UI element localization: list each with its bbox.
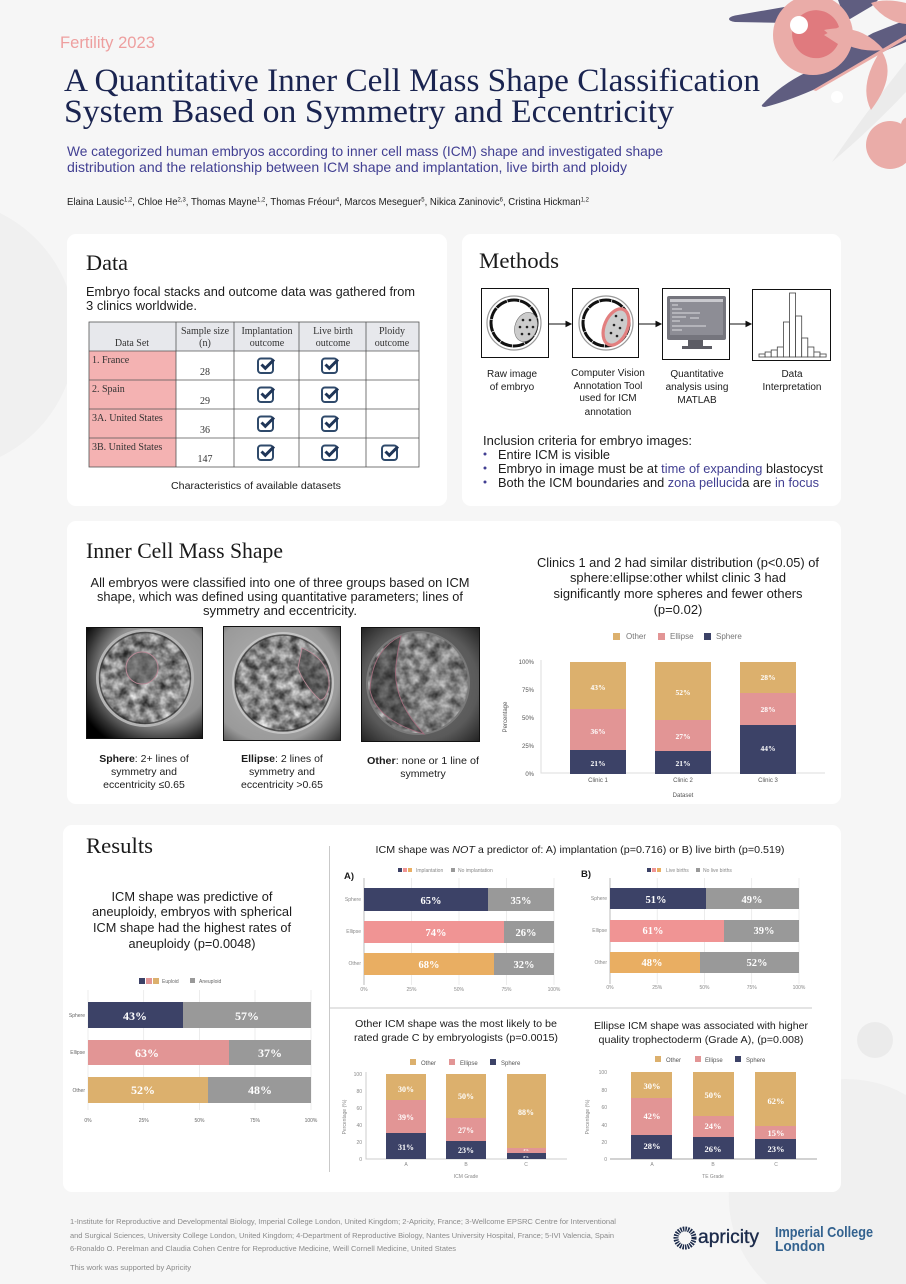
stacked bar chart: TE grade <box>585 1056 817 1180</box>
bar chart: A implantation: 74% <box>426 928 446 939</box>
text: trophectoderm finding: Ellipse ICM shape was associated with higher <box>594 1020 808 1032</box>
text: inclusion criteria: Both the ICM boundaries and zona pellucida are in focus <box>498 476 819 490</box>
legend: Aneuploid <box>199 979 221 985</box>
stacked bar chart: ICM grade: 30% <box>398 1085 414 1094</box>
text: aneuploidy finding: ICM shape had the highest rates of <box>93 920 291 935</box>
bar chart: A implantation: A) <box>344 871 354 882</box>
footer affiliations: 1-Institute for Reproductive and Developmental Biology, Imperial College London, United Kingdom; 2-Apricity, France; 3-Wellcome EPSRC Centre for Interventional <box>70 1217 616 1226</box>
labels: workflow steps: Quantitative <box>670 369 724 380</box>
authors: 1,2 <box>257 196 266 204</box>
stacked bar chart: ICM grade: 0 <box>359 1157 362 1163</box>
labels: workflow steps: of embryo <box>490 382 535 393</box>
bar chart: aneuploidy: 75% <box>250 1118 261 1124</box>
bar chart: aneuploidy: 57% <box>235 1009 259 1023</box>
legend: Ellipse <box>670 632 694 641</box>
stacked bar chart: ICM grade: B <box>464 1162 468 1168</box>
stacked bar chart: clinics: 28% <box>760 705 776 714</box>
bar chart: aneuploidy: Sphere <box>69 1013 85 1019</box>
legend: Euploid <box>162 979 179 985</box>
stacked bar chart: TE grade: B <box>711 1162 715 1168</box>
stacked bar chart: TE grade: TE Grade <box>702 1174 724 1180</box>
bar chart: A implantation: Other <box>348 961 361 967</box>
logo: imperial college london <box>775 1224 873 1255</box>
bar chart: A implantation: Ellipse <box>346 929 361 935</box>
bar chart: A implantation: 65% <box>420 896 442 907</box>
logo: imperial college london: London <box>775 1238 825 1255</box>
table: datasets: 3A. United States <box>92 413 163 424</box>
authors: , Thomas Fréour <box>265 196 336 208</box>
bar chart: A implantation: 26% <box>516 928 536 939</box>
stacked bar chart: TE grade: 30% <box>644 1081 660 1091</box>
text: classification intro: All embryos were classified into one of three groups based on ICM <box>90 576 470 590</box>
text: aneuploidy finding: ICM shape was predictive of <box>112 889 273 904</box>
stacked bar chart: clinics: Dataset <box>673 793 694 799</box>
stacked bar chart: clinics: 75% <box>522 688 535 694</box>
footer affiliations <box>70 1217 616 1272</box>
stacked bar chart: TE grade: 62% <box>768 1096 784 1106</box>
text: clinic distribution: sphere:ellipse:other whilst clinic 3 had <box>570 570 786 585</box>
authors: , Thomas Mayne <box>186 196 257 208</box>
heading: inner cell mass shape: Inner Cell Mass Shape <box>86 538 283 563</box>
arrow <box>730 322 751 326</box>
text: classification intro: shape, which was defined using quantitative parameters; lines of <box>97 590 463 604</box>
stacked bar chart: clinics: 36% <box>590 727 606 736</box>
image: sphere embryo <box>86 628 202 738</box>
bar chart: A implantation: Sphere <box>345 897 361 903</box>
table: datasets: 28 <box>200 367 210 378</box>
bar chart: B live birth: 39% <box>754 926 774 937</box>
caption: ellipse: Ellipse: 2 lines of <box>241 753 323 765</box>
labels: workflow steps: Annotation Tool <box>574 381 642 392</box>
labels: workflow steps: annotation <box>585 407 631 418</box>
stacked bar chart: clinics: 0% <box>525 772 535 778</box>
stacked bar chart: clinics: 21% <box>590 759 606 768</box>
stacked bar chart: ICM grade: 27% <box>458 1126 474 1135</box>
text: trophectoderm finding: quality trophectoderm (Grade A), (p=0.008) <box>598 1034 804 1046</box>
stacked bar chart: TE grade: 26% <box>704 1144 722 1154</box>
bar chart: B live birth: 61% <box>642 926 664 937</box>
caption: sphere: Sphere: 2+ lines of <box>99 753 189 765</box>
authors: 5 <box>421 196 425 204</box>
labels: workflow steps: MATLAB <box>677 395 717 406</box>
bar chart: A implantation: 25% <box>406 987 417 993</box>
stacked bar chart: clinics: Clinic 3 <box>758 778 778 784</box>
table: datasets: 29 <box>200 396 210 407</box>
title: A Quantitative Inner Cell Mass Shape Classification <box>64 63 760 99</box>
stacked bar chart: ICM grade: 100 <box>354 1072 362 1078</box>
bar chart: aneuploidy: 63% <box>135 1046 159 1060</box>
text: grade C finding <box>354 1018 558 1044</box>
bar chart: A implantation: 100% <box>548 987 561 993</box>
text: inclusion criteria: Inclusion criteria for embryo images: <box>483 434 692 448</box>
bar chart: B live birth <box>581 868 806 991</box>
stacked bar chart: ICM grade: A <box>404 1162 408 1168</box>
icon: raw embryo <box>482 288 548 358</box>
authors: 1,2 <box>581 196 589 204</box>
legend: No implantation <box>458 868 493 874</box>
legend: No live births <box>703 868 732 874</box>
stacked bar chart: TE grade: C <box>774 1162 778 1168</box>
caption: other: Other: none or 1 line of <box>367 755 479 767</box>
bar chart: A implantation: 68% <box>418 960 440 971</box>
stacked bar chart: clinics: Clinic 1 <box>588 778 608 784</box>
text: inclusion criteria <box>483 434 824 490</box>
bar chart: B live birth: 48% <box>642 958 662 969</box>
stacked bar chart: TE grade: 15% <box>768 1128 784 1138</box>
legend: Sphere <box>746 1058 766 1064</box>
stacked bar chart: clinics: 27% <box>676 732 690 741</box>
table: datasets: outcome <box>375 338 410 349</box>
labels: workflow steps: Interpretation <box>763 382 821 393</box>
table: datasets: Ploidy <box>379 326 405 337</box>
table: datasets: 2. Spain <box>92 384 125 395</box>
stacked bar chart: ICM grade <box>342 1059 567 1180</box>
caption: sphere: symmetry and <box>111 766 177 778</box>
caption: ellipse: eccentricity >0.65 <box>241 779 323 791</box>
text: aneuploidy finding: aneuploidy, embryos with spherical <box>92 904 292 919</box>
stacked bar chart: clinics: 43% <box>590 683 606 692</box>
text: aneuploidy finding <box>92 889 292 951</box>
table: datasets: outcome <box>250 338 285 349</box>
table: datasets: 3B. United States <box>92 442 162 453</box>
panel: inner cell mass shape <box>67 521 841 804</box>
table: datasets: (n) <box>199 338 211 349</box>
stacked bar chart: clinics: 100% <box>519 660 535 666</box>
decorative botanical illustration <box>729 0 906 169</box>
stacked bar chart: TE grade: 40 <box>601 1123 607 1129</box>
arrow <box>549 322 571 326</box>
bar chart: aneuploidy: 48% <box>248 1083 272 1097</box>
bar chart: aneuploidy: 37% <box>258 1046 282 1060</box>
stacked bar chart: clinics: Percentage <box>503 701 509 732</box>
panel: methods <box>462 234 841 506</box>
bar chart: aneuploidy: Ellipse <box>70 1050 85 1056</box>
arrow <box>639 322 661 326</box>
legend: Other <box>666 1058 681 1064</box>
stacked bar chart: TE grade: 24% <box>704 1121 722 1131</box>
text: not a predictor: ICM shape was NOT a predictor of: A) implantation (p=0.716) or B) live birth (p=0.519) <box>376 844 784 856</box>
text: data intro <box>86 285 415 313</box>
authors: Elaina Lausic <box>67 196 129 208</box>
bar chart: aneuploidy: 25% <box>139 1118 149 1124</box>
table: datasets: 147 <box>198 454 212 465</box>
stacked bar chart: ICM grade: 88% <box>518 1108 534 1117</box>
caption: other: symmetry <box>400 768 446 780</box>
authors: , Chloe He <box>132 196 178 208</box>
caption: ellipse <box>241 753 323 791</box>
stacked bar chart: TE grade: 20 <box>601 1140 607 1146</box>
stacked bar chart: ICM grade: 31% <box>398 1143 414 1152</box>
stacked bar chart: ICM grade: 20 <box>356 1140 362 1146</box>
labels: workflow steps: used for ICM <box>579 393 637 404</box>
legend: Implantation <box>416 868 443 874</box>
bar chart: B live birth: Other <box>594 960 607 966</box>
text: trophectoderm finding <box>594 1020 808 1046</box>
bar chart: B live birth: 51% <box>646 895 666 906</box>
stacked bar chart: TE grade: 0 <box>604 1157 607 1163</box>
table: datasets: Sample size <box>181 326 230 337</box>
text: aneuploidy finding: aneuploidy (p=0.0048) <box>128 936 256 951</box>
image: other embryo <box>362 628 480 742</box>
stacked bar chart: TE grade: 23% <box>768 1144 784 1154</box>
legend: Live births <box>666 868 689 874</box>
labels: workflow steps: Raw image <box>487 369 537 380</box>
legend <box>139 978 221 985</box>
stacked bar chart: clinics <box>503 632 825 799</box>
legend: Sphere <box>501 1061 521 1067</box>
authors: 4 <box>336 196 340 204</box>
stacked bar chart: TE grade: 28% <box>644 1141 660 1151</box>
bar chart: aneuploidy: 43% <box>123 1009 147 1023</box>
bar chart: aneuploidy: 50% <box>194 1118 205 1124</box>
text: grade C finding: Other ICM shape was the most likely to be <box>355 1018 557 1030</box>
text: clinic distribution <box>537 555 819 617</box>
conference label: Fertility 2023 <box>60 33 155 52</box>
stacked bar chart: ICM grade: 40 <box>356 1123 362 1129</box>
subtitle <box>67 143 663 175</box>
bar chart: B live birth: Ellipse <box>592 928 607 934</box>
stacked bar chart: TE grade: 50% <box>704 1090 722 1100</box>
bar chart: A implantation: 75% <box>501 987 512 993</box>
bar chart: A implantation: 50% <box>454 987 465 993</box>
stacked bar chart: TE grade: 100 <box>599 1070 607 1076</box>
icon: annotated embryo <box>572 288 638 358</box>
labels: workflow steps <box>487 368 821 418</box>
legend: Other <box>626 632 646 641</box>
authors: 2,3 <box>178 196 186 204</box>
bar chart: B live birth: 50% <box>699 985 710 991</box>
bar chart: aneuploidy: Other <box>72 1088 85 1094</box>
labels: workflow steps: Computer Vision <box>571 368 645 379</box>
bar chart: B live birth: 100% <box>793 985 806 991</box>
text: data intro: Embryo focal stacks and outcome data was gathered from <box>86 285 415 299</box>
text: clinic distribution: (p=0.02) <box>654 602 702 617</box>
stacked bar chart: clinics: 50% <box>522 716 535 722</box>
stacked bar chart: ICM grade: 60 <box>356 1106 362 1112</box>
stacked bar chart: TE grade: 80 <box>601 1088 607 1094</box>
heading: results: Results <box>86 833 153 858</box>
stacked bar chart: clinics: 44% <box>760 744 776 753</box>
bar chart: A implantation <box>344 868 561 993</box>
bar chart: aneuploidy: 52% <box>131 1083 155 1097</box>
title <box>64 63 760 130</box>
legend <box>410 1059 521 1067</box>
icon: histogram <box>752 290 830 360</box>
caption: sphere <box>99 753 189 791</box>
text: clinic distribution: Clinics 1 and 2 had similar distribution (p<0.05) of <box>537 555 819 570</box>
labels: workflow steps: analysis using <box>666 382 728 393</box>
bar chart: A implantation: 0% <box>360 987 368 993</box>
stacked bar chart: ICM grade: 80 <box>356 1089 362 1095</box>
bar chart: A implantation: 32% <box>514 960 534 971</box>
legend <box>613 632 742 641</box>
stacked bar chart: ICM grade: 8% <box>523 1155 529 1159</box>
stacked bar chart: clinics: 21% <box>676 759 690 768</box>
legend <box>655 1056 766 1064</box>
caption: other <box>367 755 479 780</box>
text: classification intro <box>90 576 470 618</box>
legend: Ellipse <box>705 1058 723 1064</box>
caption: table: Characteristics of available datasets <box>171 480 341 492</box>
caption: ellipse: symmetry and <box>249 766 315 778</box>
stacked bar chart: ICM grade: 4% <box>523 1148 529 1152</box>
stacked bar chart: clinics: Clinic 2 <box>673 778 693 784</box>
table: datasets: 1. France <box>92 355 130 366</box>
stacked bar chart: clinics: 28% <box>760 673 776 682</box>
authors: 1,2 <box>124 196 133 204</box>
bar chart: B live birth: 0% <box>606 985 614 991</box>
heading: data: Data <box>86 250 128 275</box>
image: ellipse embryo <box>224 626 340 740</box>
subtitle: We categorized human embryos according to inner cell mass (ICM) shape and investigated shape <box>67 143 663 159</box>
bar chart: aneuploidy: 100% <box>305 1118 318 1124</box>
panel: data <box>67 234 447 506</box>
bar chart: aneuploidy: 0% <box>84 1118 92 1124</box>
stacked bar chart: TE grade: Percentage (%) <box>585 1099 591 1134</box>
bar chart: B live birth: 52% <box>746 958 768 969</box>
bar chart: B live birth: 25% <box>652 985 663 991</box>
legend <box>647 868 732 874</box>
text: grade C finding: rated grade C by embryologists (p=0.0015) <box>354 1032 558 1044</box>
caption: sphere: eccentricity ≤0.65 <box>103 779 185 791</box>
text: inclusion criteria: Embryo in image must be at time of expanding blastocyst <box>498 462 824 476</box>
text: clinic distribution: significantly more spheres and fewer others <box>554 586 803 601</box>
bar chart: B live birth: Sphere <box>591 896 607 902</box>
footer affiliations: 6-Ronaldo O. Perelman and Claudia Cohen Centre for Reproductive Medicine, Weill Cornell Medicine, United States <box>70 1244 456 1253</box>
authors: 6 <box>500 196 503 204</box>
table: datasets: 36 <box>200 425 210 436</box>
stacked bar chart: ICM grade: 23% <box>458 1146 474 1155</box>
footer affiliations: and Surgical Sciences, University College London, United Kingdom; 4-Department of Reproductive Biology, Nantes University Hospital, France; 5-IVI Valencia, Spain <box>70 1231 614 1240</box>
title: System Based on Symmetry and Eccentricity <box>64 94 674 130</box>
stacked bar chart: TE grade: 60 <box>601 1105 607 1111</box>
stacked bar chart: ICM grade: 39% <box>398 1113 414 1122</box>
legend: Other <box>421 1061 436 1067</box>
subtitle: distribution and the relationship between ICM shape and implantation, live birth and ploidy <box>67 159 627 175</box>
table: datasets: Live birth <box>313 326 353 337</box>
stacked bar chart: ICM grade: Percentage (%) <box>342 1099 348 1134</box>
logo: apricity: apricity <box>698 1227 760 1248</box>
bar chart: A implantation: 35% <box>510 896 532 907</box>
icon: monitor <box>662 288 730 360</box>
table: datasets: outcome <box>316 338 351 349</box>
legend <box>398 868 493 874</box>
bar chart: B live birth: 49% <box>742 895 762 906</box>
authors: , Cristina Hickman <box>503 196 581 208</box>
table: datasets: Data Set <box>115 338 149 349</box>
labels: workflow steps: Data <box>781 369 803 380</box>
legend: Sphere <box>716 632 742 641</box>
stacked bar chart: clinics: 25% <box>522 744 535 750</box>
panel: results <box>63 825 841 1192</box>
authors: , Nikica Zaninovic <box>425 196 500 208</box>
footer affiliations: This work was supported by Apricity <box>70 1263 191 1272</box>
heading: methods: Methods <box>479 248 559 273</box>
text: inclusion criteria: Entire ICM is visible <box>498 448 610 462</box>
stacked bar chart: clinics: 52% <box>676 688 690 697</box>
text: data intro: 3 clinics worldwide. <box>86 299 197 313</box>
table: datasets: Implantation <box>241 326 293 337</box>
table: datasets <box>89 322 419 467</box>
stacked bar chart: ICM grade: 50% <box>458 1092 474 1101</box>
legend: Ellipse <box>460 1061 478 1067</box>
bar chart: aneuploidy <box>69 978 318 1124</box>
bar chart: B live birth: B) <box>581 869 591 880</box>
stacked bar chart: ICM grade: C <box>524 1162 528 1168</box>
text: classification intro: symmetry and eccentricity. <box>203 604 357 618</box>
stacked bar chart: TE grade: A <box>650 1162 654 1168</box>
stacked bar chart: ICM grade: ICM Grade <box>454 1174 478 1180</box>
logo: imperial college london: Imperial College <box>775 1224 873 1241</box>
stacked bar chart: TE grade: 42% <box>644 1111 660 1121</box>
bar chart: B live birth: 75% <box>747 985 757 991</box>
authors: , Marcos Meseguer <box>339 196 422 208</box>
